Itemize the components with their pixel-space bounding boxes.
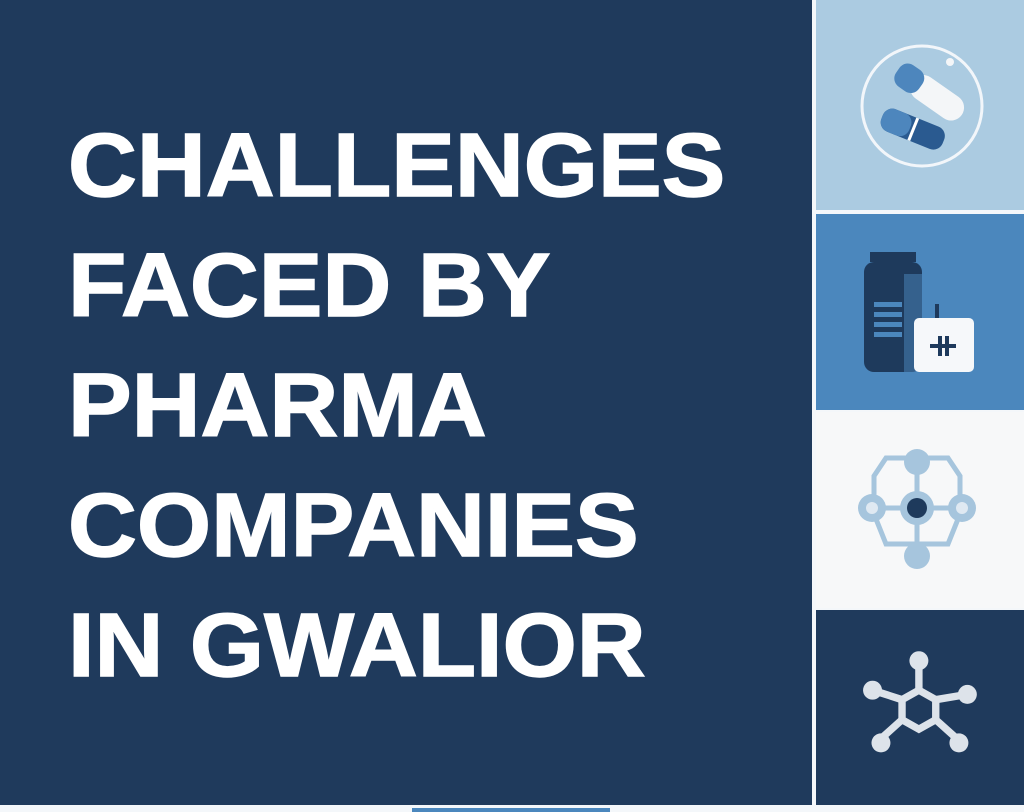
- icon: molecule: [863, 651, 977, 752]
- title: PHARMA: [68, 356, 487, 456]
- main title panel: [0, 0, 812, 805]
- icon: medicine bottle: [864, 252, 974, 372]
- icon: network diagram: [858, 449, 976, 569]
- panel: network icon: [816, 412, 1024, 608]
- title: FACED BY: [68, 236, 550, 336]
- bottom accent bar: [412, 808, 610, 812]
- panel: pills icon: [816, 0, 1024, 210]
- panel: bottle icon: [816, 214, 1024, 410]
- title: COMPANIES: [68, 476, 639, 576]
- title: [68, 116, 725, 696]
- icon: pills: [860, 44, 984, 168]
- title: CHALLENGES: [68, 116, 725, 216]
- title: IN GWALIOR: [68, 596, 646, 696]
- panel: molecule icon: [816, 610, 1024, 805]
